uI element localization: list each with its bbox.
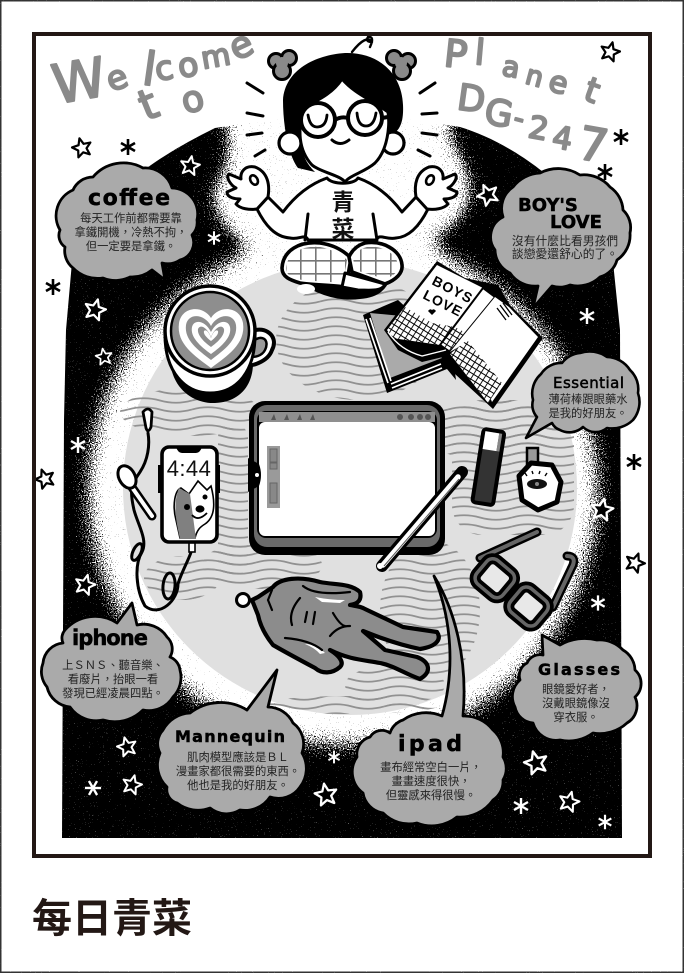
icon: mannequin xyxy=(236,579,439,679)
glasses text: 沒戴眼鏡像沒 xyxy=(542,696,610,710)
bubble: iphone xyxy=(41,603,181,722)
iphone text: 上ＳＮＳ、聽音樂、 xyxy=(62,658,164,672)
body and arms xyxy=(257,178,428,240)
gray disc xyxy=(123,261,577,715)
coffee text: 每天工作前都需要靠 xyxy=(80,211,182,225)
coffee heading: coffee xyxy=(88,186,170,211)
heading: welcome to planet DG-247: e xyxy=(100,56,133,100)
character: meditating girl xyxy=(227,37,457,300)
stars and sparkles xyxy=(33,40,647,829)
icon: earbuds cable xyxy=(114,409,193,610)
icon: boys love book: LOVE xyxy=(421,286,465,320)
ipad text: 畫布經常空白一片， xyxy=(380,760,482,774)
ears xyxy=(279,132,404,154)
heading: welcome to planet DG-247: G xyxy=(481,91,516,137)
heading: welcome to planet DG-247: W xyxy=(47,45,111,117)
bubble: glasses xyxy=(512,635,641,741)
heading: welcome to planet DG-247: 2 xyxy=(526,109,551,148)
heading: welcome to planet DG-247: D xyxy=(455,77,488,122)
heading: welcome to planet DG-247: n xyxy=(522,60,547,94)
heading: welcome to planet DG-247: t xyxy=(579,70,605,112)
essential text: 薄荷棒跟眼藥水 xyxy=(548,392,628,406)
icon: boys love book xyxy=(363,261,543,409)
shirt text xyxy=(332,189,354,242)
heading: welcome to planet DG-247: o xyxy=(177,77,209,123)
wave texture xyxy=(120,280,574,714)
heading: welcome to planet DG-247: a xyxy=(500,49,522,85)
round glasses xyxy=(296,101,388,144)
glasses text: 眼鏡愛好者， xyxy=(542,682,610,696)
boy's love heading: LOVE xyxy=(550,212,602,233)
night sky arch xyxy=(62,110,622,838)
glasses text: 穿衣服。 xyxy=(553,710,599,724)
iphone heading: iphone xyxy=(72,626,148,650)
shirt text: 青 xyxy=(332,189,354,215)
face xyxy=(300,79,389,182)
heading: welcome to planet DG-247: e xyxy=(545,64,572,103)
essential heading: Essential xyxy=(553,374,624,392)
heading: welcome to planet DG-247: - xyxy=(510,101,528,135)
phone clock: 4:44 xyxy=(167,456,211,481)
heading: welcome to planet DG-247: e xyxy=(222,23,260,69)
shirt text: 菜 xyxy=(332,216,354,242)
bubble: coffee xyxy=(56,163,198,281)
plaid pants xyxy=(282,242,402,300)
heading: welcome to planet DG-247: 7 xyxy=(574,116,612,174)
bubble: ipad xyxy=(352,576,506,826)
hair xyxy=(283,37,403,172)
left hand xyxy=(227,167,269,209)
bubble: essential xyxy=(526,351,640,438)
motion lines xyxy=(247,83,437,156)
ipad text: 畫畫速度很快， xyxy=(391,774,471,788)
heading: welcome to planet DG-247: P xyxy=(442,31,469,77)
boy's love text: 沒有什麼比看男孩們 xyxy=(512,234,618,248)
heading: welcome to planet DG-247: o xyxy=(175,44,201,86)
mannequin heading: Mannequin xyxy=(175,727,285,746)
ipad text: 但靈感來得很慢。 xyxy=(386,788,476,802)
icon: glasses xyxy=(472,532,574,629)
heading: welcome to planet DG-247: l xyxy=(473,33,486,74)
essential text: 是我的好朋友。 xyxy=(548,406,628,420)
bubble: mannequin xyxy=(157,670,306,814)
icon: menthol stick xyxy=(472,429,504,505)
boy's love heading: BOY'S xyxy=(518,195,578,216)
book title: BOYS xyxy=(430,272,476,307)
right hand xyxy=(415,167,457,209)
speckled glow xyxy=(71,40,615,762)
heading: welcome to planet DG-247: 4 xyxy=(550,119,575,158)
boy's love text: 談戀愛還舒心的了。 xyxy=(512,247,618,261)
icon: eye drop bottle xyxy=(519,448,561,510)
phone wallpaper dog xyxy=(174,481,214,539)
icon: drawing tablet xyxy=(248,401,445,555)
coffee text: 拿鐵開機，冷熱不拘， xyxy=(75,225,187,239)
icon: smartphone xyxy=(158,447,220,552)
heading: welcome to planet DG-247: t xyxy=(131,79,165,130)
title: 每日青菜 xyxy=(32,897,192,941)
iphone text: 發現已經凌晨四點。 xyxy=(62,686,164,700)
icon: stylus pen xyxy=(377,472,462,569)
glasses heading: Glasses xyxy=(538,660,620,679)
hair buns xyxy=(268,50,416,80)
illustration panel xyxy=(62,37,622,838)
heading: welcome to planet DG-247: c xyxy=(152,47,176,89)
heading: welcome to planet DG-247: l xyxy=(139,41,160,97)
icon: coffee cup xyxy=(165,286,274,403)
mannequin text: 漫畫家都很需要的東西。 xyxy=(176,764,300,778)
heading: welcome to planet DG-247: m xyxy=(198,37,233,77)
bubble: boy's love xyxy=(491,169,631,308)
mannequin text: 肌肉模型應該是ＢＬ xyxy=(187,750,289,764)
illustration frame xyxy=(34,34,650,856)
mannequin text: 他也是我的好朋友。 xyxy=(187,778,289,792)
ipad heading: ipad xyxy=(398,732,462,757)
iphone text: 看廢片，抬眼一看 xyxy=(68,672,158,686)
coffee text: 但一定要是拿鐵。 xyxy=(86,239,176,253)
